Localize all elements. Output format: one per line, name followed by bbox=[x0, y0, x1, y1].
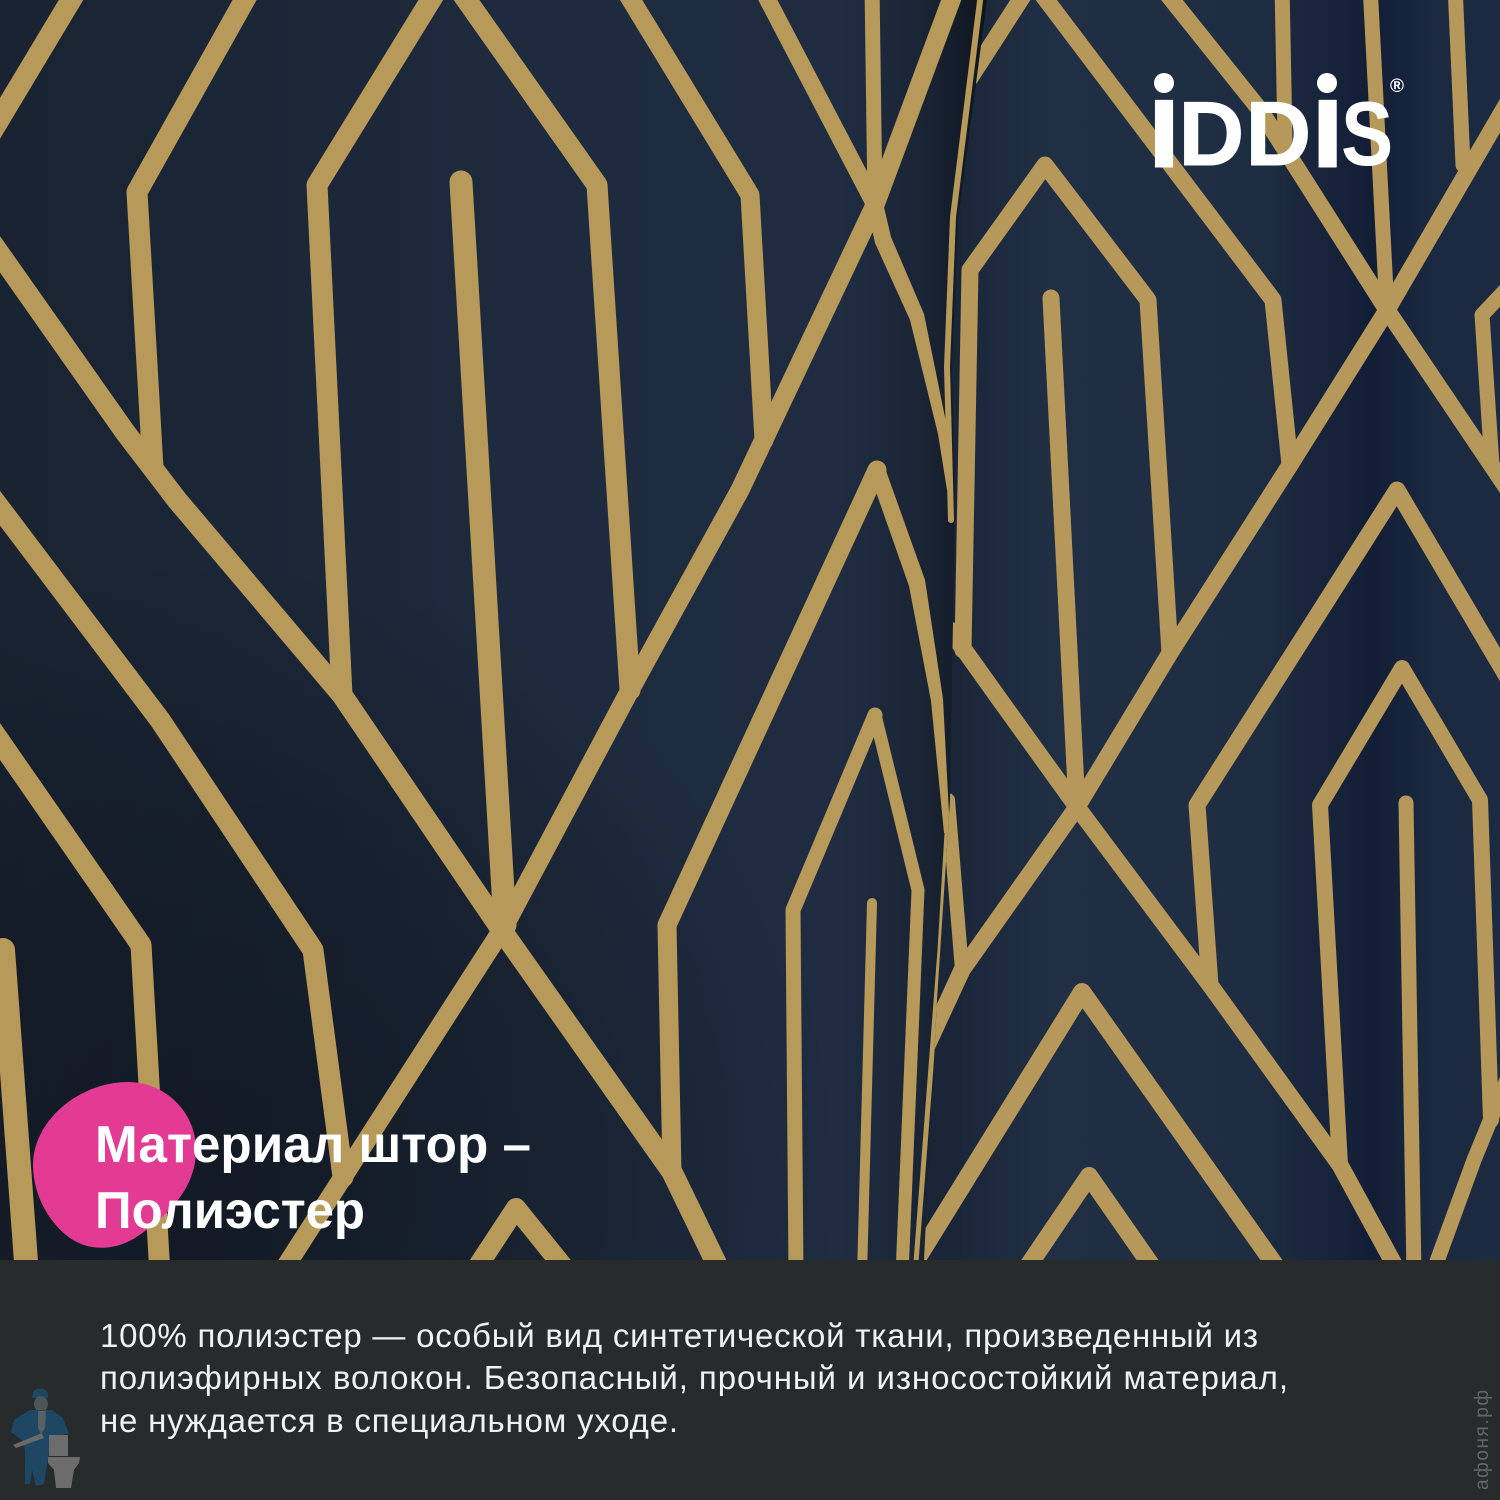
right curtain gold pattern bbox=[915, 0, 1500, 1275]
heading: Полиэстер bbox=[95, 1182, 365, 1240]
description text: не нуждается в специальном уходе. bbox=[100, 1402, 678, 1439]
logo: IDDIS: S bbox=[1341, 82, 1393, 184]
pink accent blob bbox=[33, 1082, 196, 1248]
left curtain gold pattern bbox=[0, 0, 982, 1275]
icon: plumber with toilet bbox=[11, 1388, 80, 1488]
description text: 100% полиэстер — особый вид синтетической ткани, произведенный из bbox=[100, 1317, 1258, 1354]
logo: IDDIS: I bbox=[1151, 84, 1177, 185]
left curtain fabric bbox=[0, 0, 990, 1275]
description panel bbox=[0, 1260, 1500, 1500]
right curtain fabric bbox=[900, 0, 1500, 1275]
logo: IDDIS: D bbox=[1178, 84, 1244, 185]
heading: Материал штор – bbox=[95, 1116, 531, 1174]
heading bbox=[95, 1116, 531, 1240]
watermark: vertical site name: афоня.рф bbox=[1472, 1390, 1493, 1490]
logo: IDDIS: D bbox=[1246, 84, 1311, 185]
description text: полиэфирных волокон. Безопасный, прочный и износостойкий материал, bbox=[100, 1359, 1288, 1396]
logo: IDDIS bbox=[1151, 73, 1404, 185]
description text bbox=[100, 1317, 1288, 1439]
logo: IDDIS: I bbox=[1315, 84, 1340, 185]
logo: IDDIS: ® bbox=[1390, 76, 1404, 97]
